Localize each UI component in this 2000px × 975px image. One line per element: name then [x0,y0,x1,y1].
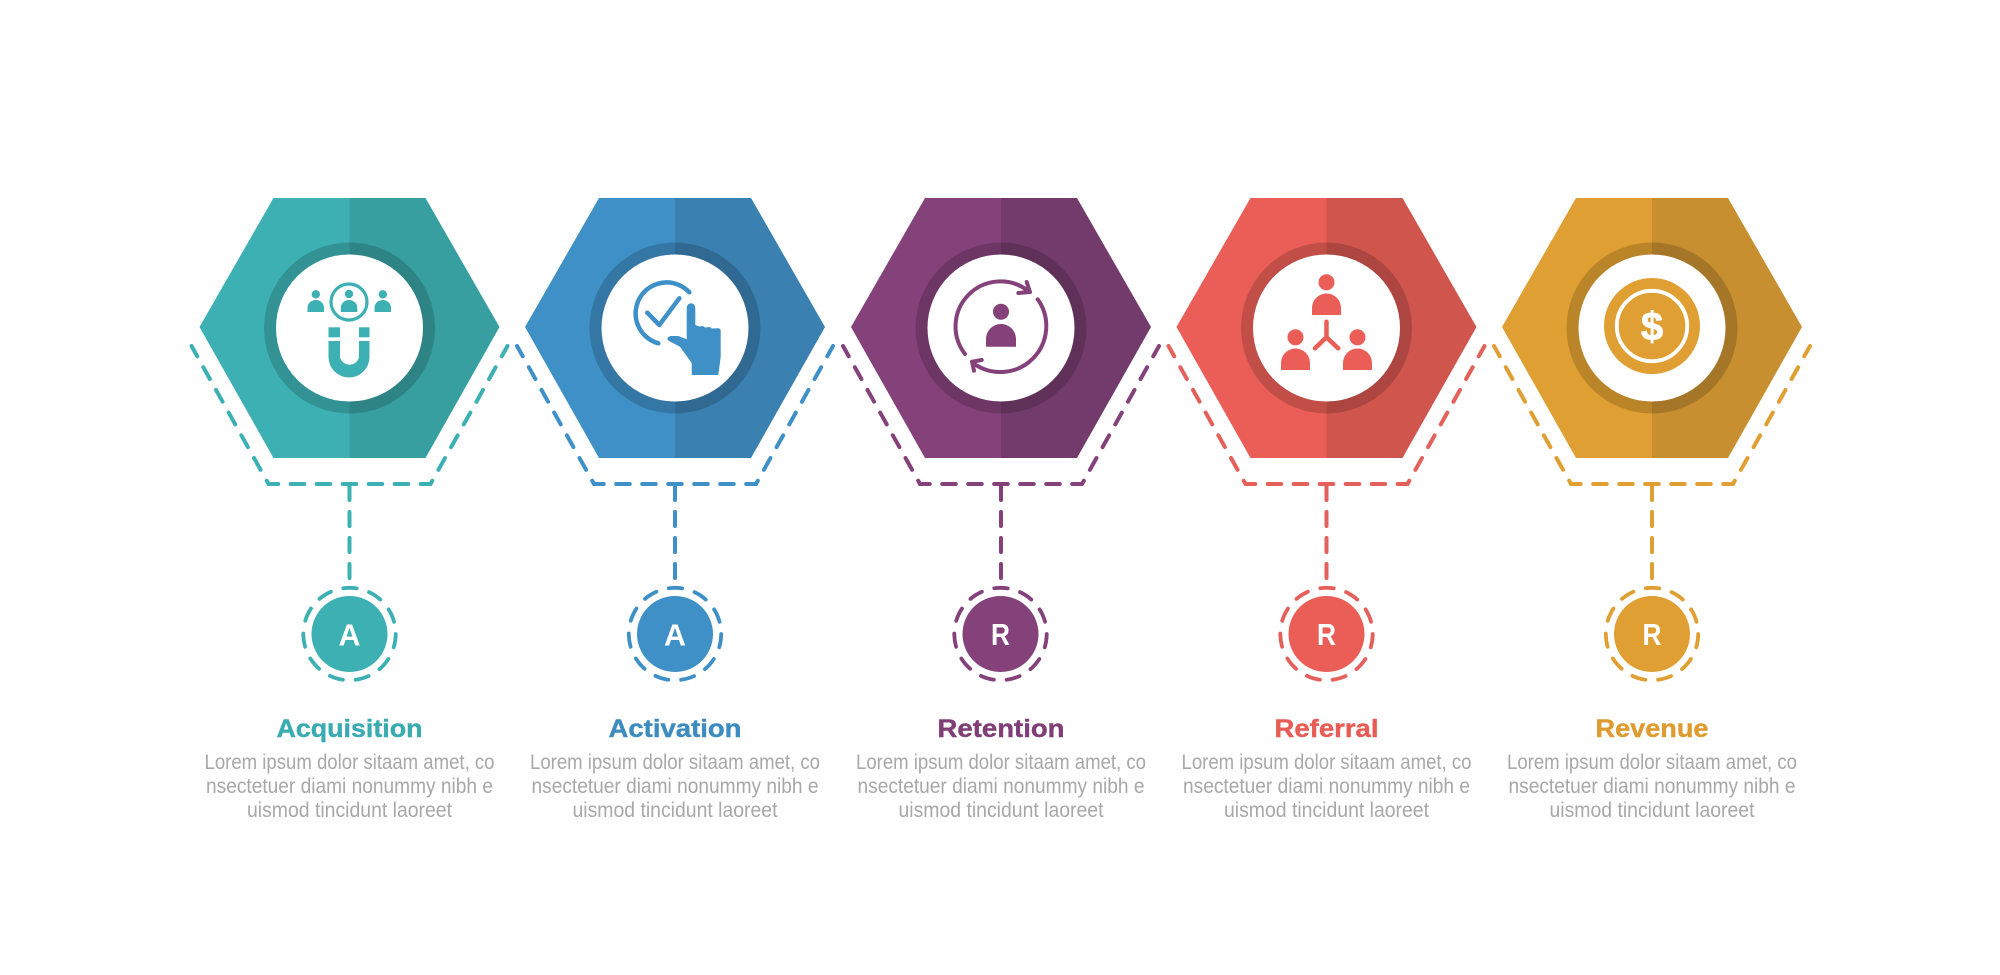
dashed connector [1324,486,1328,581]
heading: Referral [1274,715,1378,743]
description: uismod tincidunt laoreet [247,799,452,822]
dashed hexagon outline [1168,346,1484,484]
hexagon badge [1176,198,1476,458]
hexagon badge [851,198,1151,458]
description: Lorem ipsum dolor sitaam amet, co [530,751,820,774]
panel: Retention [843,198,1159,822]
description: uismod tincidunt laoreet [1224,799,1429,822]
icon: dollar coin: $ [1641,305,1663,349]
description: nsectetuer diami nonummy nibh e [206,775,493,798]
description [1182,751,1472,822]
letter badge [303,588,396,680]
dashed hexagon outline [192,346,508,484]
letter badge [629,588,721,680]
icon: retained customer cycle [956,281,1046,372]
description: nsectetuer diami nonummy nibh e [1508,775,1796,798]
letter badge: A [338,618,360,652]
panel: Acquisition [192,198,508,822]
heading: Acquisition [276,715,422,743]
description: uismod tincidunt laoreet [1550,799,1755,822]
description: uismod tincidunt laoreet [572,799,778,822]
letter badge: A [664,618,686,652]
hexagon badge [200,198,500,458]
description [856,751,1146,822]
letter badge: R [1317,617,1336,652]
panel: Revenue [1494,198,1810,822]
description: nsectetuer diami nonummy nibh e [532,775,818,798]
dashed connector [1650,486,1654,581]
heading: Retention [938,715,1064,743]
letter badge [1280,588,1373,680]
panel: Activation [517,198,833,822]
dashed connector [348,486,352,581]
hexagon badge [525,198,825,458]
description: uismod tincidunt laoreet [898,799,1104,822]
description [530,751,820,822]
letter badge: R [991,617,1010,652]
description: Lorem ipsum dolor sitaam amet, co [1507,751,1797,774]
description [204,751,494,822]
description: Lorem ipsum dolor sitaam amet, co [1182,751,1472,774]
hexagon badge [1502,198,1802,458]
dashed hexagon outline [843,346,1159,484]
heading: Revenue [1596,715,1709,743]
icon: dollar coin [1604,278,1700,374]
letter badge: R [1642,617,1662,652]
heading: Activation [608,715,742,743]
letter badge [954,588,1047,680]
description [1507,751,1797,822]
icon: magnet attracting people [308,284,391,378]
icon: hand tapping checkmark [636,282,721,375]
description: nsectetuer diami nonummy nibh e [1183,775,1470,798]
description: Lorem ipsum dolor sitaam amet, co [204,751,494,774]
dashed hexagon outline [517,346,833,484]
dashed connector [673,486,677,581]
panel: Referral [1168,198,1484,822]
dashed hexagon outline [1494,346,1810,484]
dashed connector [999,486,1003,581]
description: Lorem ipsum dolor sitaam amet, co [856,751,1146,774]
description: nsectetuer diami nonummy nibh e [858,775,1144,798]
letter badge [1606,588,1698,680]
icon: referral network [1281,274,1372,370]
